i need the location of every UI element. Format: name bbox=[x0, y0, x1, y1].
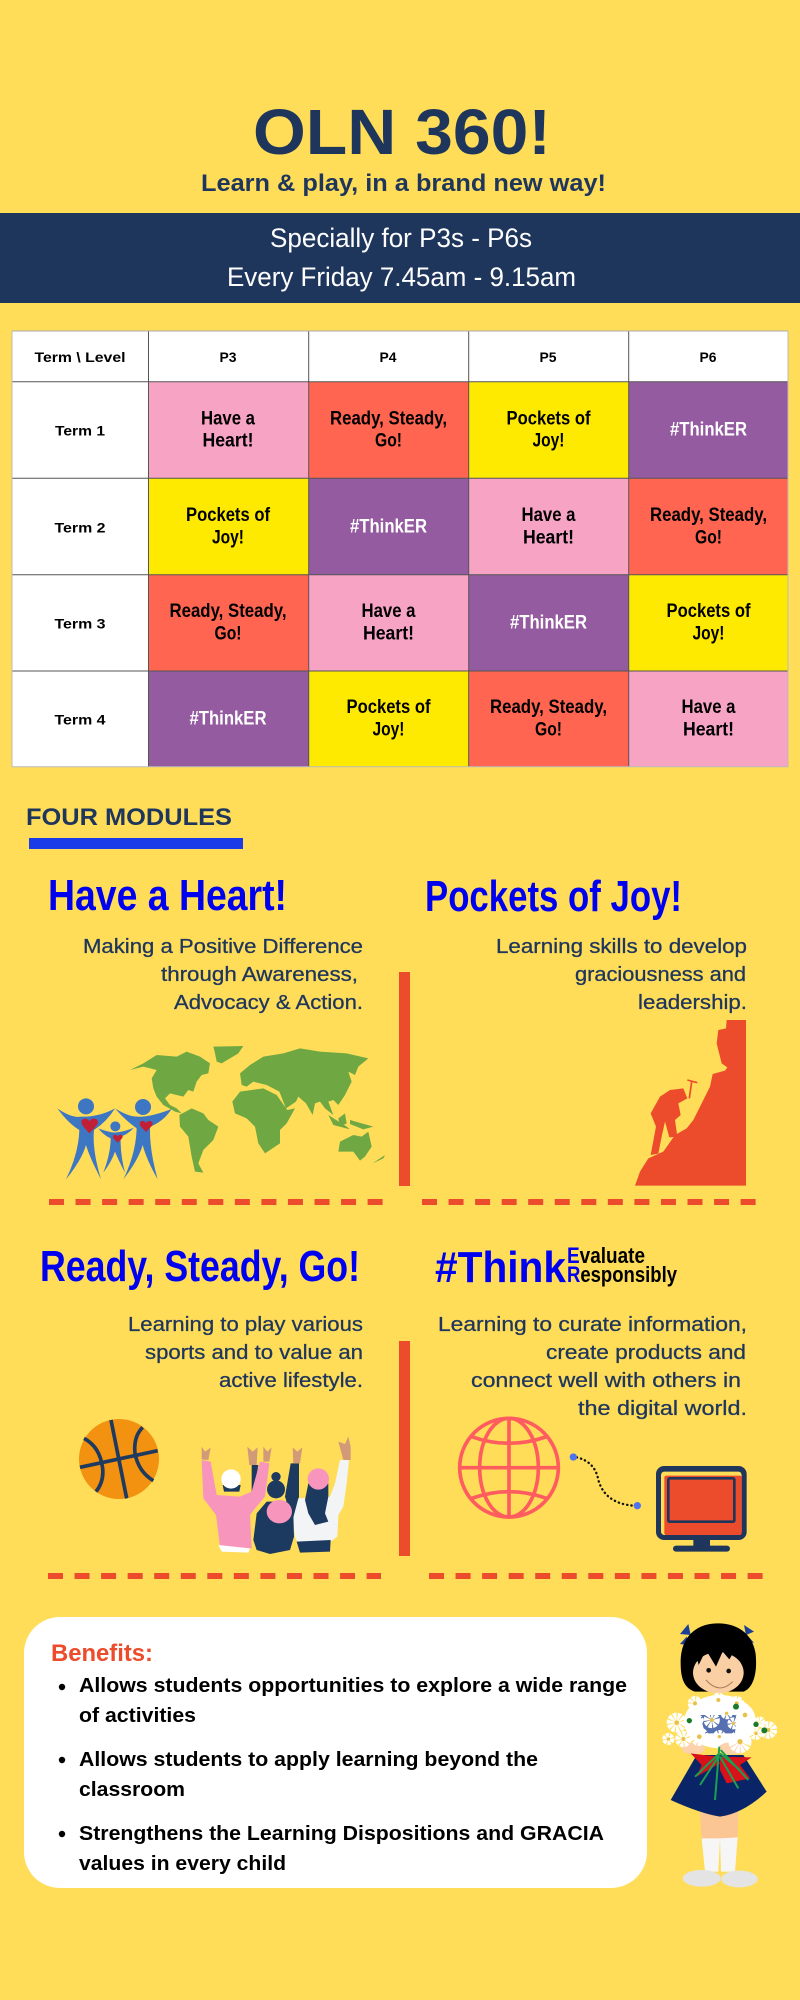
row: term 1: Ready, Steady, bbox=[330, 408, 447, 430]
row: term 4 bbox=[12, 671, 788, 767]
row: term 1 bbox=[12, 382, 788, 478]
heading: pockets of joy: Pockets of Joy! bbox=[425, 872, 682, 921]
banner: audience and schedule: Every Friday 7.45am - 9.15am bbox=[227, 262, 576, 292]
table header row: P3 bbox=[220, 349, 237, 365]
icon: girl holding bouquet bbox=[665, 1623, 773, 1887]
table header row: Term \ Level bbox=[34, 349, 126, 365]
description: pockets of joy bbox=[496, 936, 747, 1014]
heading: think evaluate responsibly: Evaluate bbox=[567, 1243, 645, 1268]
row: term 2: Go! bbox=[695, 528, 722, 548]
icon: family with hearts bbox=[57, 1098, 172, 1179]
row: term 4: Pockets of bbox=[346, 697, 431, 718]
row: term 1: Term 1 bbox=[55, 423, 105, 439]
row: term 4: Have a bbox=[682, 697, 736, 718]
subtitle: Learn & play, in a brand new way! bbox=[201, 170, 606, 197]
module: pockets of joy bbox=[425, 872, 747, 1186]
center divider, bottom bbox=[399, 1341, 410, 1556]
icon: climber on rock bbox=[635, 1020, 746, 1186]
row: term 1: Heart! bbox=[202, 431, 254, 452]
icon: world map bbox=[130, 1046, 385, 1173]
description: have a heart: through Awareness, bbox=[161, 964, 358, 986]
row: term 3: Heart! bbox=[363, 624, 414, 644]
description: think evaluate responsibly: create products and bbox=[546, 1342, 746, 1364]
table header row: P6 bbox=[700, 349, 717, 365]
banner: audience and schedule bbox=[0, 213, 800, 303]
description: pockets of joy: Learning skills to develop bbox=[496, 936, 747, 958]
table header row: P4 bbox=[380, 349, 397, 365]
row: term 2: Have a bbox=[522, 505, 576, 526]
description: pockets of joy: leadership. bbox=[638, 992, 747, 1014]
module: think evaluate responsibly bbox=[435, 1243, 747, 1552]
dashed divider, bottom left bbox=[48, 1573, 381, 1579]
row: term 1: Pockets of bbox=[506, 408, 591, 430]
row: term 3: Joy! bbox=[692, 624, 724, 644]
table header row: P5 bbox=[540, 349, 557, 365]
description: ready steady go: sports and to value an bbox=[145, 1342, 363, 1364]
description: ready steady go: Learning to play various bbox=[128, 1314, 363, 1336]
row: term 2 bbox=[12, 478, 788, 575]
description: ready steady go: active lifestyle. bbox=[219, 1370, 363, 1392]
icon: computer monitor bbox=[656, 1466, 747, 1552]
dashed divider, bottom right bbox=[429, 1573, 763, 1579]
benefit 3: values in every child bbox=[79, 1853, 286, 1875]
benefit 2 bbox=[59, 1749, 538, 1801]
row: term 1: Have a bbox=[201, 408, 255, 430]
description: pockets of joy: graciousness and bbox=[575, 964, 746, 986]
row: term 4: Joy! bbox=[372, 720, 404, 740]
description: have a heart: Advocacy & Action. bbox=[174, 992, 363, 1014]
benefit 1: Allows students opportunities to explore a wide range bbox=[79, 1675, 627, 1697]
table header row bbox=[12, 331, 788, 382]
heading: think evaluate responsibly bbox=[435, 1243, 678, 1292]
benefit 1: of activities bbox=[79, 1705, 196, 1727]
row: term 4: Heart! bbox=[683, 720, 734, 740]
row: term 1: Go! bbox=[375, 431, 402, 452]
module: have a heart bbox=[48, 871, 385, 1179]
row: term 2: Pockets of bbox=[186, 505, 271, 526]
benefit 1 bbox=[59, 1675, 627, 1727]
row: term 2: Heart! bbox=[523, 528, 574, 548]
row: term 4: Go! bbox=[535, 720, 562, 740]
row: term 3: Have a bbox=[362, 601, 416, 622]
banner: audience and schedule: Specially for P3s - P6s bbox=[270, 223, 532, 253]
benefit 2: Allows students to apply learning beyond the bbox=[79, 1749, 538, 1771]
dashed divider, top left bbox=[49, 1199, 383, 1205]
description: think evaluate responsibly: the digital world. bbox=[578, 1398, 747, 1420]
section heading: four modules: FOUR MODULES bbox=[26, 804, 232, 831]
benefit 3: Strengthens the Learning Dispositions and GRACIA bbox=[79, 1823, 604, 1845]
row: term 3 bbox=[12, 575, 788, 671]
module: ready steady go bbox=[40, 1242, 363, 1554]
dashed divider, top right bbox=[422, 1199, 756, 1205]
row: term 3: Term 3 bbox=[54, 615, 106, 631]
title: OLN 360! bbox=[253, 96, 551, 168]
heading: think evaluate responsibly: #Think bbox=[435, 1243, 566, 1292]
heading: ready steady go: Ready, Steady, Go! bbox=[40, 1242, 360, 1291]
icon: basketball bbox=[79, 1419, 159, 1499]
row: term 4: Ready, Steady, bbox=[490, 697, 607, 718]
icon: globe bbox=[460, 1418, 558, 1517]
row: term 2: Term 2 bbox=[54, 520, 106, 536]
arrow: dotted connector bbox=[570, 1453, 641, 1509]
row: term 4: Term 4 bbox=[54, 712, 106, 728]
center divider, top bbox=[399, 972, 410, 1186]
row: term 2: Ready, Steady, bbox=[650, 505, 767, 526]
description: think evaluate responsibly bbox=[438, 1314, 747, 1420]
icon: cheering friends bbox=[202, 1437, 351, 1554]
row: term 2: #ThinkER bbox=[350, 516, 427, 538]
panel: benefits bbox=[24, 1617, 647, 1888]
description: think evaluate responsibly: connect well with others in bbox=[471, 1370, 741, 1392]
heading: think evaluate responsibly: Responsibly bbox=[567, 1262, 678, 1287]
row: term 1: #ThinkER bbox=[670, 420, 747, 441]
row: term 3: Ready, Steady, bbox=[170, 601, 286, 622]
description: have a heart bbox=[83, 936, 363, 1014]
heading: have a heart: Have a Heart! bbox=[48, 871, 287, 920]
description: have a heart: Making a Positive Difference bbox=[83, 936, 363, 958]
row: term 3: Pockets of bbox=[666, 601, 751, 622]
row: term 3: #ThinkER bbox=[510, 612, 587, 633]
row: term 1: Joy! bbox=[532, 431, 564, 452]
benefit 2: classroom bbox=[79, 1779, 185, 1801]
schedule table bbox=[12, 331, 788, 767]
row: term 3: Go! bbox=[214, 624, 242, 644]
section heading: four modules bbox=[26, 804, 243, 849]
row: term 2: Joy! bbox=[212, 528, 244, 548]
row: term 4: #ThinkER bbox=[190, 708, 267, 730]
description: ready steady go bbox=[128, 1314, 363, 1392]
benefit 3 bbox=[59, 1823, 604, 1875]
benefits heading: Benefits: bbox=[51, 1640, 153, 1667]
description: think evaluate responsibly: Learning to curate information, bbox=[438, 1314, 747, 1336]
